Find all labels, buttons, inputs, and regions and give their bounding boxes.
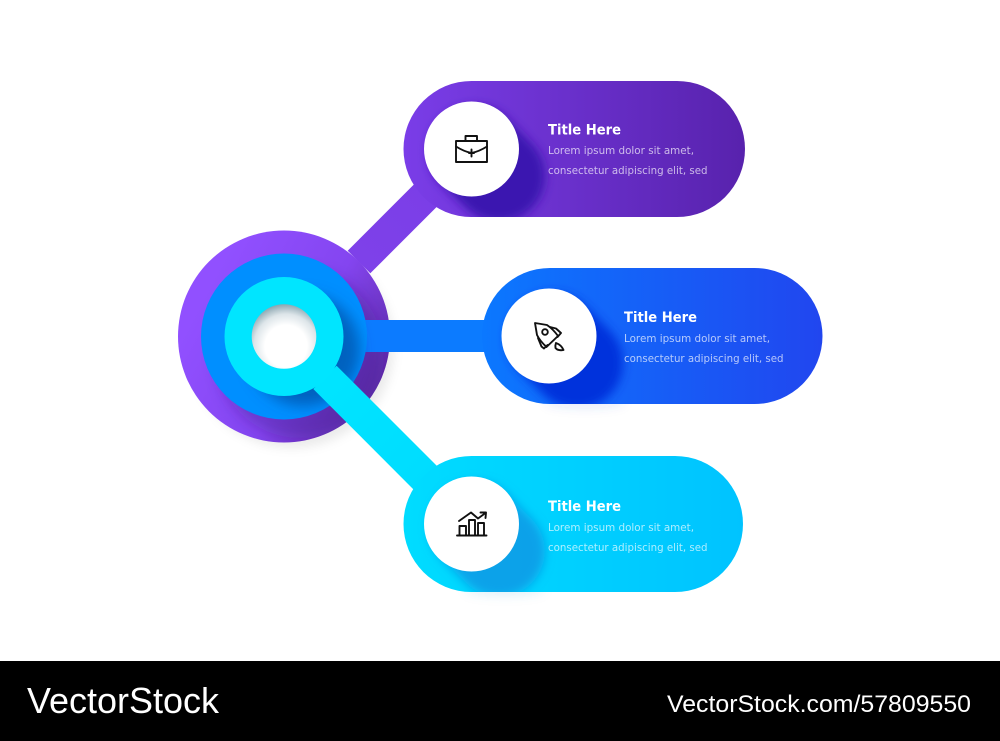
footer band bbox=[0, 661, 1000, 741]
footer logo text: VectorStock bbox=[27, 680, 220, 721]
connector: purple arm bbox=[348, 173, 448, 273]
blue ring inner shadow bbox=[248, 294, 360, 406]
hub: cyan inner ring bbox=[224, 277, 344, 396]
hub soft shadow bbox=[190, 244, 394, 448]
hub: blue middle ring bbox=[201, 254, 367, 420]
pill 2 icon shadow bbox=[553, 339, 577, 363]
pill 3 icon circle bbox=[424, 476, 519, 572]
pill 2 title: Title Here bbox=[624, 309, 697, 326]
pill 1 title: Title Here bbox=[548, 122, 621, 138]
pill 1 body line 1: Lorem ipsum dolor sit amet, bbox=[548, 145, 694, 157]
hub: purple outer ring bbox=[178, 230, 390, 442]
icon: briefcase bbox=[456, 136, 487, 162]
pill 3 body line 1: Lorem ipsum dolor sit amet, bbox=[548, 522, 694, 534]
icon: rocket bbox=[535, 323, 564, 350]
hub: white centre bbox=[252, 304, 316, 369]
icon: growth chart bbox=[457, 512, 486, 536]
pill 3 body line 2: consectetur adipiscing elit, sed bbox=[548, 542, 708, 554]
pill 2 body line 2: consectetur adipiscing elit, sed bbox=[624, 353, 784, 365]
pill 3 icon shadow bbox=[475, 527, 499, 551]
pill 1: purple card bbox=[404, 81, 745, 217]
pill 2 icon circle bbox=[502, 288, 596, 384]
connector: blue arm bbox=[340, 320, 490, 352]
pill 3 drop shadow bbox=[465, 584, 545, 596]
pill 1 background bbox=[404, 81, 745, 217]
pill 1 body line 2: consectetur adipiscing elit, sed bbox=[548, 165, 708, 177]
footer background bbox=[0, 661, 1000, 741]
pill 1 icon circle bbox=[424, 102, 519, 196]
pill 2 drop shadow bbox=[545, 396, 625, 408]
pill 3 background bbox=[404, 456, 743, 592]
pill 3 title: Title Here bbox=[548, 498, 621, 515]
pill 3: cyan card bbox=[404, 456, 743, 596]
pill 2: blue card bbox=[482, 268, 822, 408]
connector: cyan arm bbox=[313, 366, 445, 497]
pill 1 icon shadow bbox=[475, 152, 499, 176]
pill 2 background bbox=[482, 268, 822, 404]
pill 2 body line 1: Lorem ipsum dolor sit amet, bbox=[624, 333, 770, 345]
footer url text: VectorStock.com/57809550 bbox=[667, 691, 971, 718]
purple ring inner shadow bbox=[216, 270, 384, 438]
